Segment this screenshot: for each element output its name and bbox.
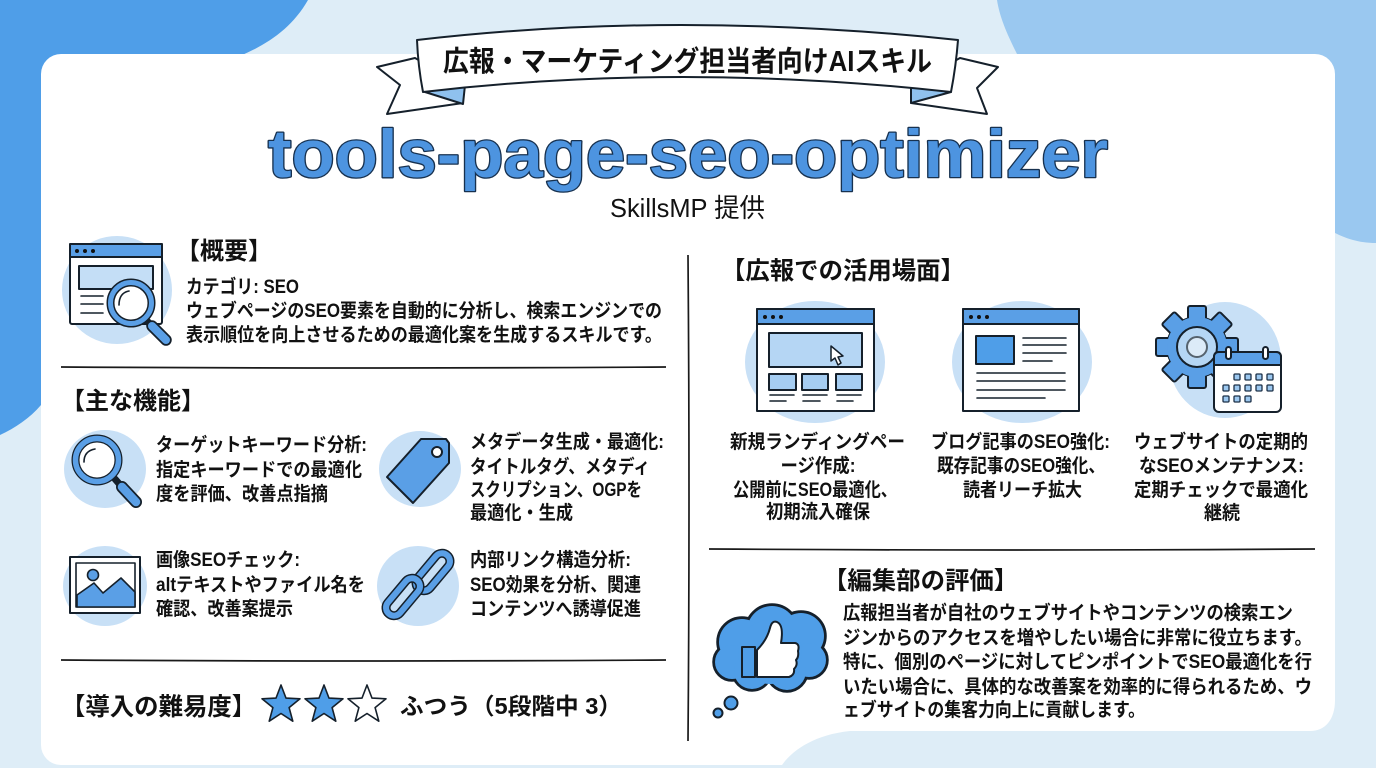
- feature: image SEO check: 画像SEOチェック:: [156, 549, 300, 571]
- icon: thumbs up thought cloud: [714, 605, 827, 718]
- main title: tools-page-seo-optimizer: [268, 116, 1108, 192]
- background blob: top right: [997, 0, 1376, 243]
- use case: blog SEO: [931, 301, 1110, 501]
- overview text: カテゴリ: SEO: [186, 275, 299, 298]
- use case: new landing page: ージ作成:: [780, 454, 856, 477]
- star rating: [262, 685, 386, 721]
- use case: periodic SEO maintenance: 定期チェックで最適化: [1134, 479, 1308, 501]
- feature: image SEO check: altテキストやファイル名を: [156, 574, 365, 596]
- feature: internal link analysis: SEO効果を分析、関連: [470, 574, 641, 596]
- feature: internal link analysis: コンテンツへ誘導促進: [470, 598, 641, 620]
- feature: image SEO check: [63, 546, 365, 626]
- feature: target keyword analysis: 度を評価、改善点指摘: [156, 483, 328, 505]
- feature: metadata generation: スクリプション、OGPを: [470, 479, 642, 501]
- use case: new landing page: 初期流入確保: [766, 501, 870, 523]
- difficulty label: ふつう（5段階中 3）: [400, 693, 622, 719]
- title ribbon banner: [377, 25, 998, 114]
- heading: use cases: 【広報での活用場面】: [721, 258, 965, 285]
- editorial review text: 広報担当者が自社のウェブサイトやコンテンツの検索エン: [843, 601, 1293, 624]
- banner text: 広報・マーケティング担当者向けAIスキル: [443, 45, 932, 78]
- feature: target keyword analysis: [64, 430, 367, 508]
- use case: blog SEO: 読者リーチ拡大: [963, 479, 1082, 501]
- background blob: top left: [0, 0, 308, 435]
- icon: browser with magnifier: [62, 236, 172, 344]
- subtitle: SkillsMP 提供: [610, 193, 765, 223]
- editorial review text: ェブサイトの集客力向上に貢献します。: [843, 698, 1145, 721]
- heading: main features: 【主な機能】: [61, 388, 205, 415]
- feature: metadata generation: メタデータ生成・最適化:: [470, 430, 664, 453]
- editorial review text: ジンからのアクセスを増やしたい場合に非常に役立ちます。: [843, 627, 1312, 649]
- use case: new landing page: [730, 301, 905, 523]
- feature: target keyword analysis: ターゲットキーワード分析:: [156, 434, 367, 456]
- overview text: 表示順位を向上させるための最適化案を生成するスキルです。: [186, 323, 662, 346]
- feature: metadata generation: タイトルタグ、メタディ: [470, 455, 650, 478]
- feature: image SEO check: 確認、改善案提示: [156, 598, 293, 620]
- editorial review text: [843, 601, 1312, 721]
- feature: internal link analysis: [377, 546, 641, 626]
- use case: periodic SEO maintenance: [1134, 302, 1308, 524]
- heading: difficulty: 【導入の難易度】: [61, 694, 256, 721]
- panel: editorial review: [714, 568, 1312, 721]
- overview text: [186, 275, 662, 346]
- panel: use cases: [721, 258, 1308, 524]
- icon: calendar: [1214, 347, 1281, 412]
- use case: blog SEO: 既存記事のSEO強化、: [937, 455, 1105, 477]
- feature: target keyword analysis: 指定キーワードでの最適化: [156, 459, 362, 481]
- heading: editorial review: 【編集部の評価】: [823, 568, 1018, 595]
- editorial review text: いたい場合に、具体的な改善案を効率的に得られるため、ウ: [843, 676, 1312, 698]
- use case: periodic SEO maintenance: 継続: [1204, 502, 1240, 524]
- background blob: bottom right: [780, 700, 1335, 768]
- use case: periodic SEO maintenance: なSEOメンテナンス:: [1139, 455, 1304, 477]
- feature: metadata generation: [379, 430, 664, 524]
- use case: new landing page: 新規ランディングペー: [730, 430, 905, 453]
- panel: overview: [62, 236, 662, 346]
- editorial review text: 特に、個別のページに対してピンポイントでSEO最適化を行: [843, 650, 1312, 673]
- feature: metadata generation: 最適化・生成: [470, 501, 573, 524]
- use case: new landing page: 公開前にSEO最適化、: [733, 479, 897, 501]
- icon: gear: [1156, 306, 1238, 388]
- panel: difficulty: [61, 685, 622, 721]
- feature: internal link analysis: 内部リンク構造分析:: [470, 549, 631, 571]
- panel: main features: [61, 388, 664, 626]
- heading: overview: 【概要】: [176, 238, 272, 265]
- use case: periodic SEO maintenance: ウェブサイトの定期的: [1134, 430, 1308, 453]
- overview text: ウェブページのSEO要素を自動的に分析し、検索エンジンでの: [186, 299, 662, 322]
- use case: blog SEO: ブログ記事のSEO強化:: [931, 430, 1110, 453]
